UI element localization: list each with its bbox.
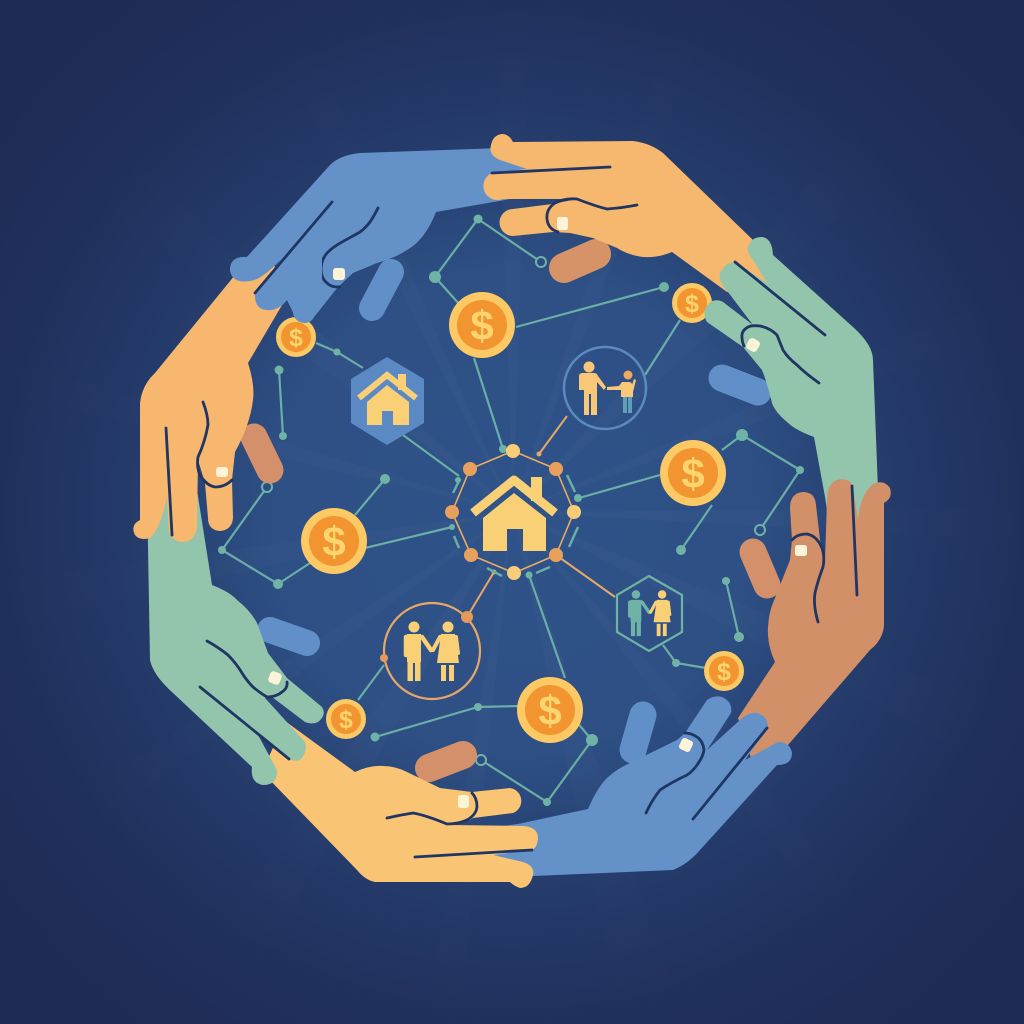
circle: adult and child (564, 347, 646, 429)
child figure (607, 370, 636, 413)
central hub: house in ring (445, 444, 581, 580)
coin: large top (449, 292, 515, 358)
coin: large bottom (517, 677, 583, 743)
coin: large top: $ (470, 302, 494, 349)
hand: brown right (738, 479, 891, 770)
hand: blue top fingertips overlapping orange wrist (230, 240, 322, 323)
hand: orange left (133, 258, 285, 542)
coin: large bottom: $ (538, 687, 562, 734)
coin: large right (660, 440, 726, 506)
network connection lines (222, 219, 800, 802)
hand: green right (704, 237, 878, 530)
coin: small lower left: $ (339, 706, 353, 734)
man (406, 622, 431, 681)
teal man (630, 590, 649, 636)
network nodes (218, 214, 804, 806)
orange connection lines (467, 416, 615, 617)
coin: small upper right: $ (685, 290, 699, 318)
hand: blue top (230, 147, 530, 323)
hand: orange bottom (262, 721, 538, 888)
coin: small lower right: $ (717, 658, 731, 686)
hand: orange top (483, 134, 770, 292)
coin: large right: $ (681, 450, 705, 497)
circle: couple (380, 603, 480, 699)
woman (433, 622, 459, 681)
hub teal dashes (453, 475, 578, 576)
icon: hexagon house (351, 357, 424, 445)
hand: green left (147, 490, 324, 785)
coin: small lower left (326, 699, 366, 739)
coin: large left: $ (322, 518, 346, 565)
hand: blue bottom (490, 696, 792, 876)
hub nodes (445, 444, 581, 580)
yellow woman (651, 590, 671, 636)
hub octagon ring (452, 451, 574, 573)
hexagon: couple (617, 576, 682, 651)
coin: small upper left (276, 317, 316, 357)
adult figure (579, 362, 606, 415)
coin: small lower right (704, 651, 744, 691)
coin: large left (301, 508, 367, 574)
coin: small upper right (672, 283, 712, 323)
icon: central house (473, 477, 555, 551)
coin: small upper left: $ (289, 324, 303, 352)
